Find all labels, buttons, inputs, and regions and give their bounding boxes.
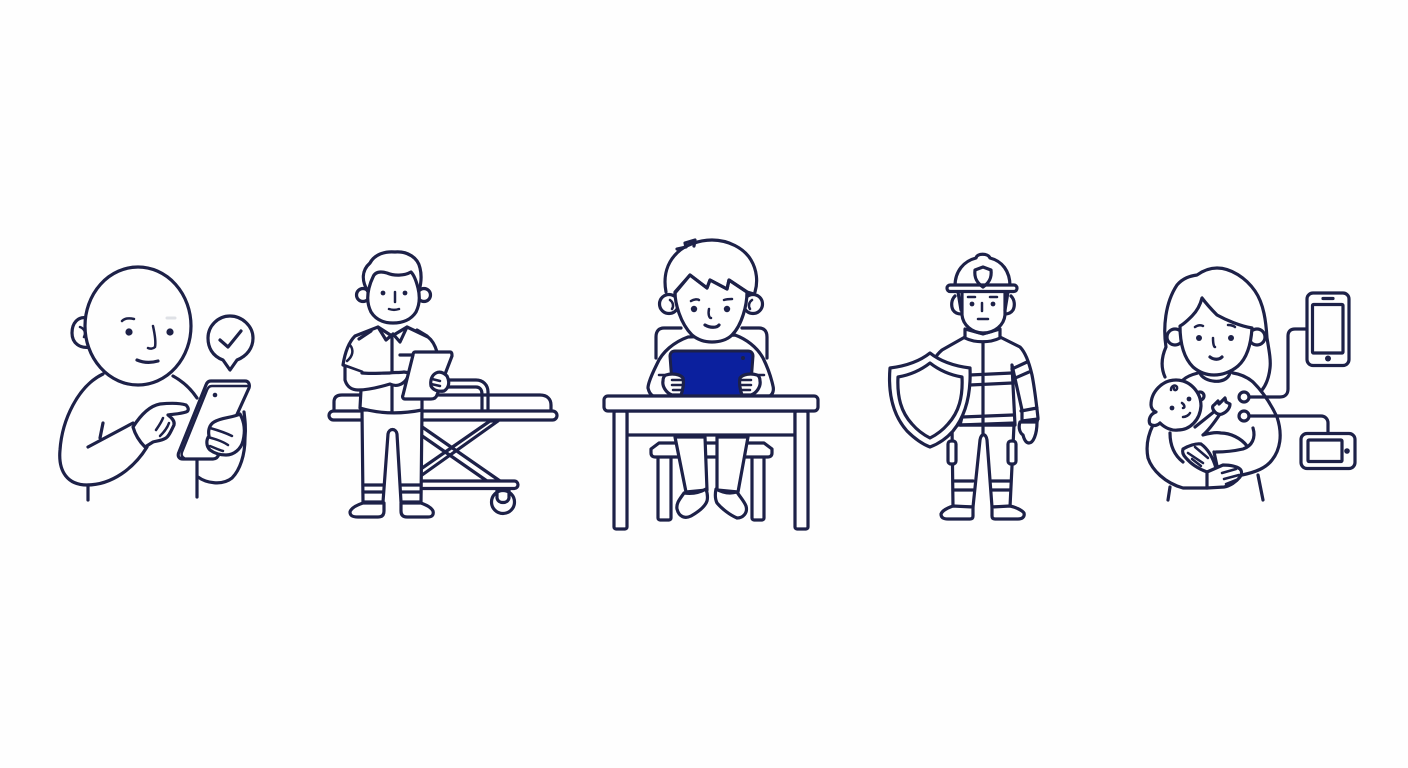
mother hair xyxy=(1162,268,1270,390)
hands xyxy=(659,374,764,395)
torso and shirt xyxy=(343,327,437,413)
clipboard xyxy=(400,352,452,399)
shield xyxy=(890,353,970,447)
mother head xyxy=(1167,298,1265,375)
legs xyxy=(350,410,433,517)
jacket xyxy=(932,329,1038,435)
head xyxy=(72,267,191,385)
arm with hand xyxy=(345,367,410,390)
phone device xyxy=(1307,293,1349,366)
connector lines xyxy=(1248,329,1328,433)
figure: man tapping phone xyxy=(60,267,253,500)
figure: mother with baby and devices xyxy=(1147,268,1355,500)
legs and feet xyxy=(675,437,748,518)
mother hands xyxy=(1183,444,1242,488)
hand holding phone xyxy=(207,414,244,455)
glove xyxy=(1019,422,1037,443)
monitor device xyxy=(1301,434,1355,468)
pointing hand xyxy=(133,403,188,447)
connector dots xyxy=(1239,392,1249,421)
helmet xyxy=(947,254,1017,292)
head xyxy=(356,252,430,323)
baby hand xyxy=(1213,398,1230,414)
figure: child at desk with tablet xyxy=(604,240,818,529)
head xyxy=(952,290,1014,333)
mother body xyxy=(1147,373,1280,500)
figure: paramedic with stretcher xyxy=(329,252,557,517)
chair back xyxy=(656,328,767,358)
baby xyxy=(1149,380,1254,462)
tablet xyxy=(670,351,753,396)
stretcher xyxy=(329,380,557,514)
head xyxy=(660,240,762,342)
speech bubble check xyxy=(208,316,253,370)
torso xyxy=(648,335,773,396)
phone xyxy=(178,381,249,459)
wheel xyxy=(492,489,514,514)
body xyxy=(60,374,245,500)
chair seat and legs xyxy=(651,443,772,520)
table xyxy=(604,396,818,529)
figure: firefighter with shield xyxy=(890,254,1038,519)
hand on clipboard xyxy=(431,372,449,391)
legs xyxy=(941,425,1024,519)
